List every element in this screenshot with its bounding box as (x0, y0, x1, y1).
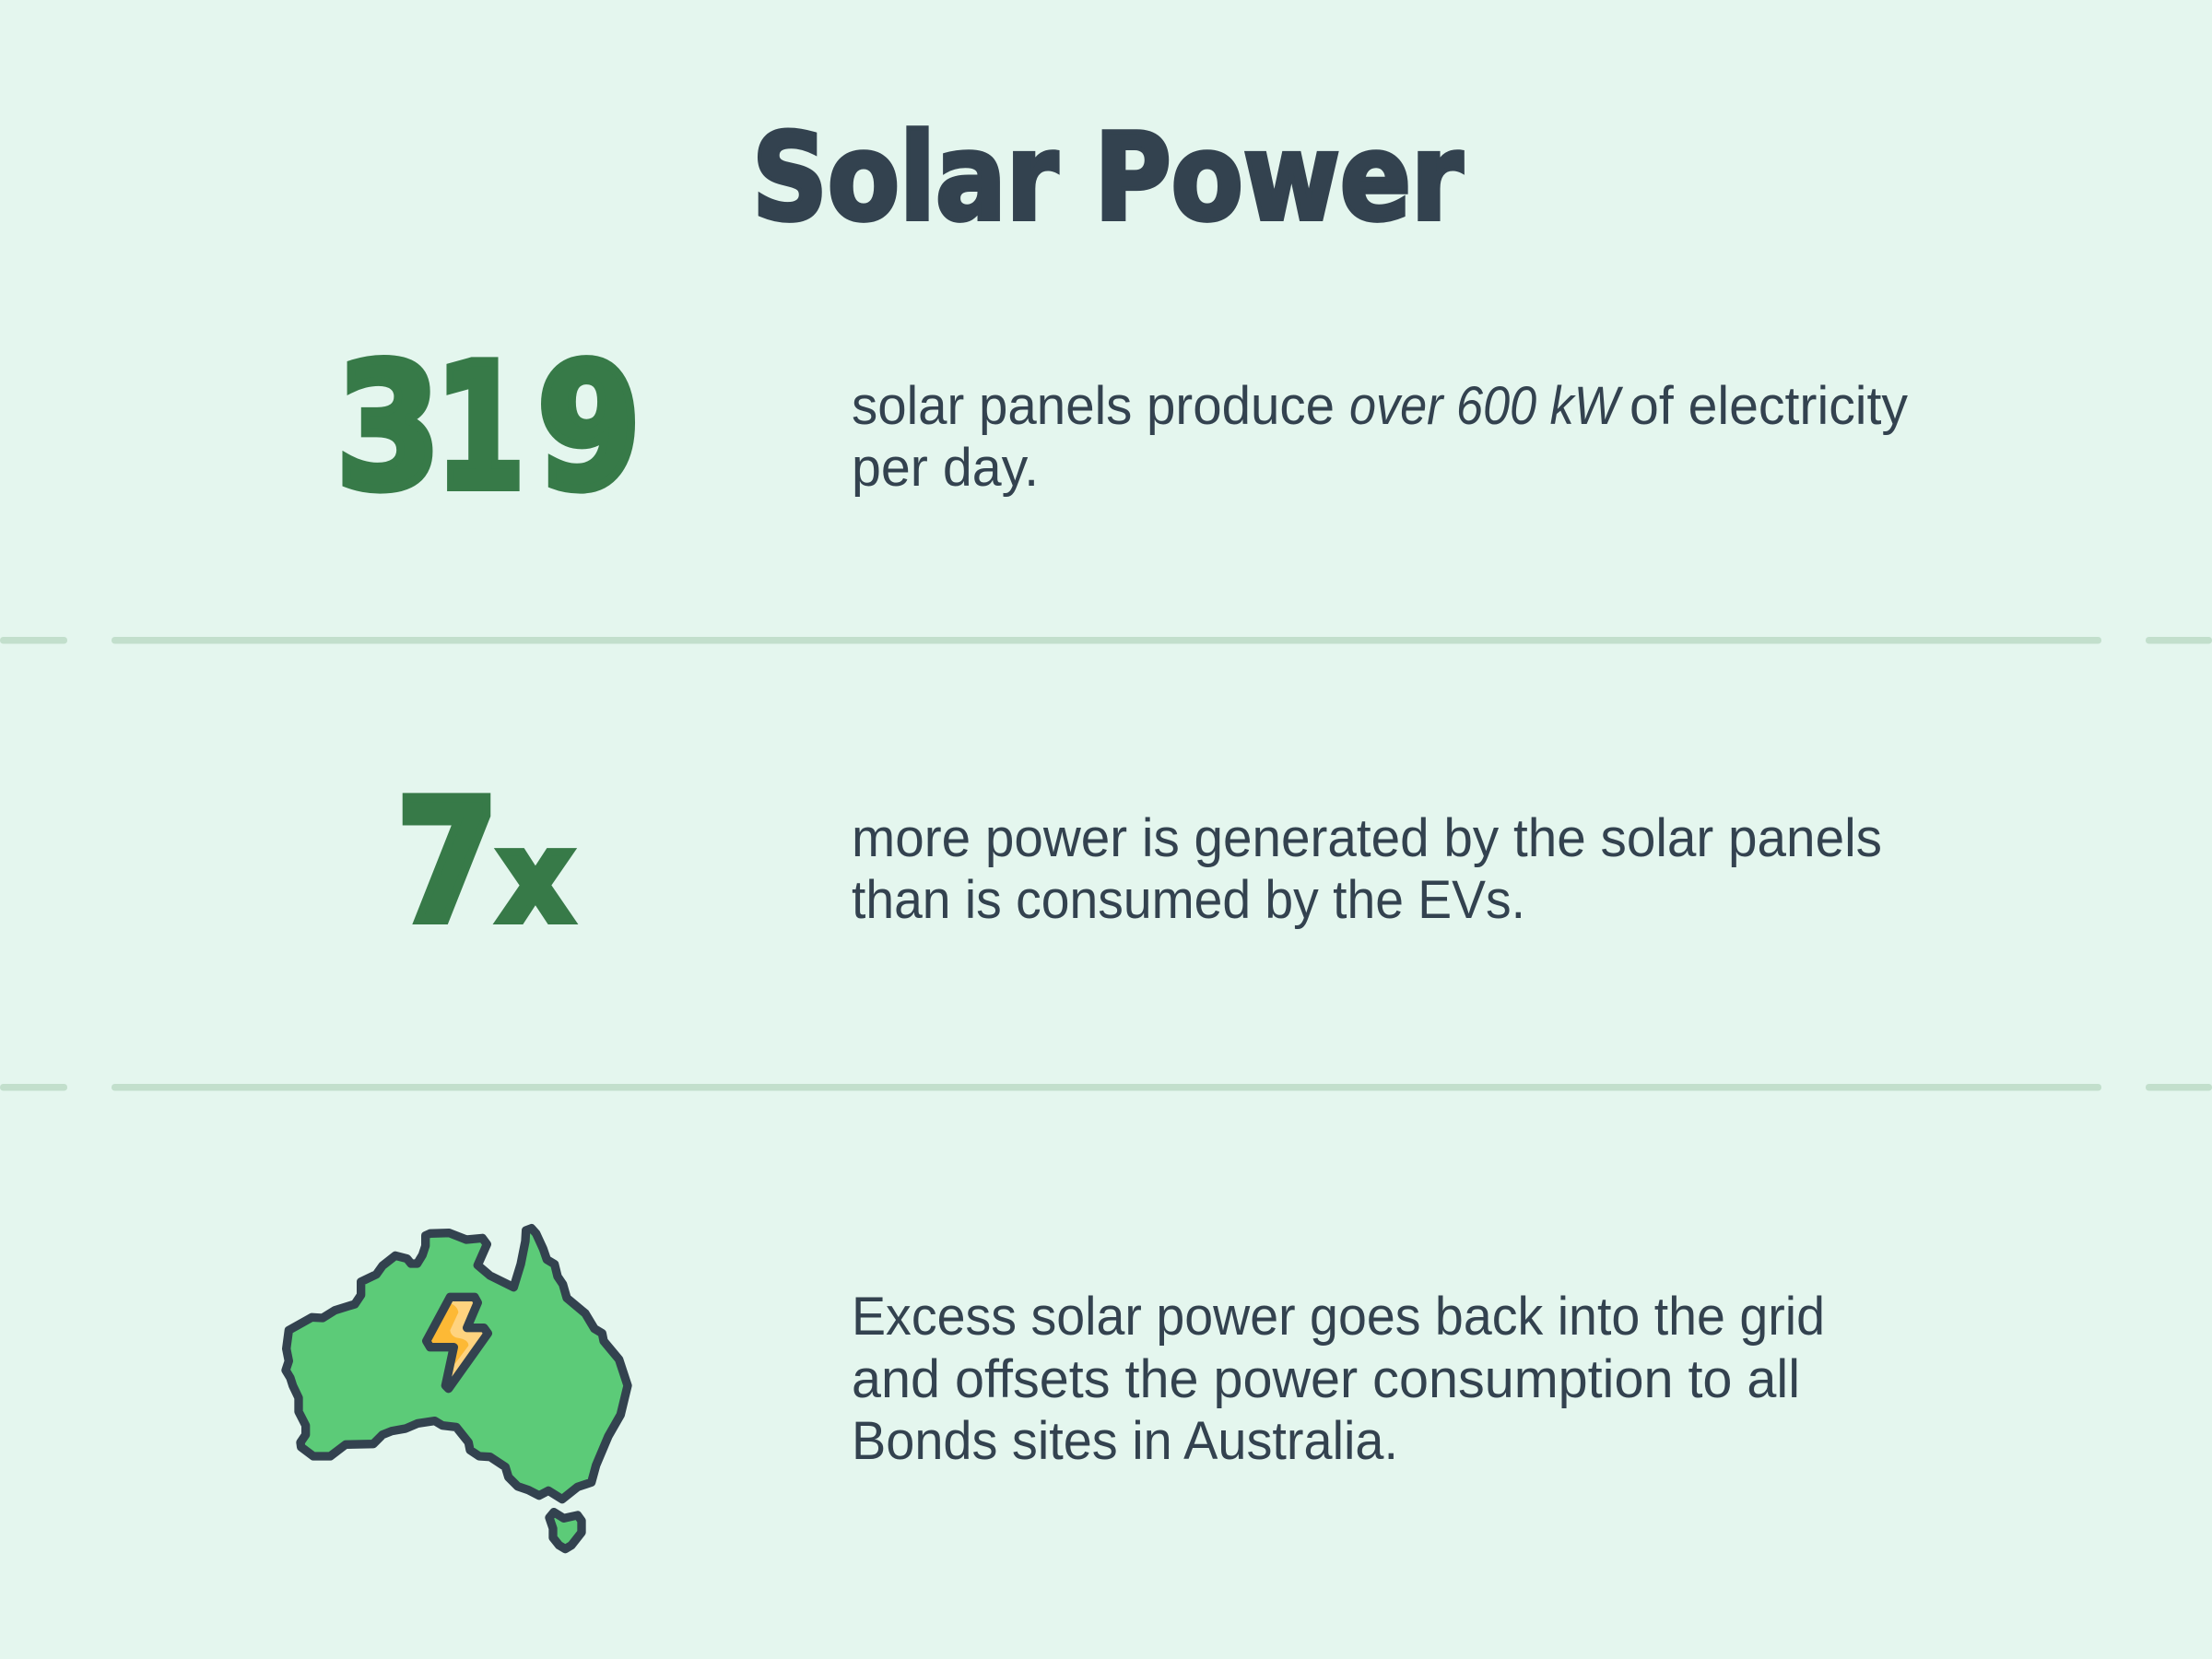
text block: more power (852, 808, 1882, 930)
stat: 7x: x (498, 805, 573, 951)
icon: Australia map with lightning bolt (286, 1229, 628, 1549)
text block: excess solar power (852, 1287, 1825, 1471)
stat: 7x: 7 (396, 764, 498, 959)
stat: 319 (336, 327, 641, 527)
stat: 319: 1 (435, 327, 525, 527)
mainland (286, 1229, 628, 1500)
tasmania (549, 1512, 582, 1549)
stat: 7x (396, 764, 573, 959)
text block: solar panels (852, 376, 1908, 498)
text block: excess solar power: Excess solar power goes back into the grid (852, 1287, 1825, 1347)
lightning bolt (427, 1297, 488, 1389)
stat: 319: 3 (336, 327, 441, 527)
text block: solar panels: over 600 kW (1349, 376, 1624, 436)
text block: more power: than is consumed by the EVs. (852, 870, 1525, 930)
title: Solar Power (752, 107, 1463, 247)
text block: solar panels: per day. (852, 438, 1039, 498)
text block: excess solar power: and offsets the power consumption to all (852, 1349, 1800, 1409)
stat: 319: 9 (537, 327, 641, 527)
text block: more power: more power is generated by the solar panels (852, 808, 1882, 868)
text block: solar panels: of electricity (1630, 376, 1908, 436)
text block: solar panels: solar panels produce (852, 376, 1335, 436)
text block: excess solar power: Bonds sites in Australia. (852, 1411, 1398, 1471)
